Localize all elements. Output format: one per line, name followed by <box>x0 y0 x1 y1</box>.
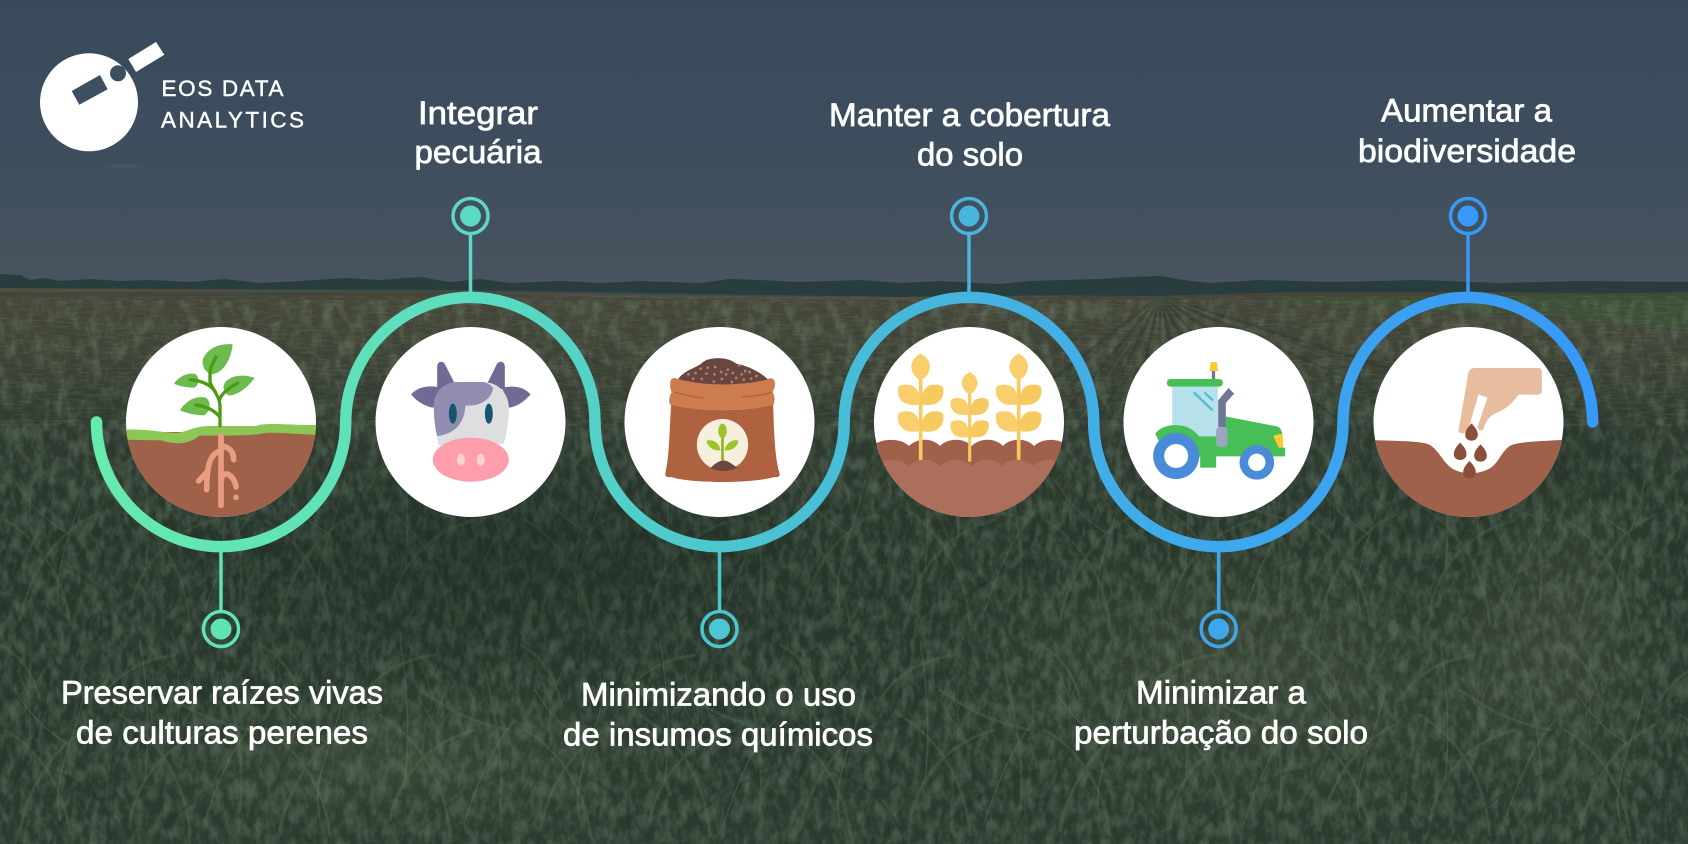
label: Minimizando o uso de insumos químicos <box>563 676 873 752</box>
label: Aumentar a biodiversidade: biodiversidade <box>1358 133 1576 169</box>
label: Aumentar a biodiversidade <box>1358 92 1576 169</box>
label: Manter a cobertura do solo <box>829 97 1110 172</box>
label: Manter a cobertura do solo: do solo <box>917 136 1023 172</box>
logo icon: satellite over globe <box>40 42 164 151</box>
label: Minimizar a perturbação do solo: Minimizar a <box>1136 674 1306 710</box>
label: Minimizando o uso de insumos químicos: de insumos químicos <box>563 716 873 752</box>
label: Integrar pecuária <box>414 95 542 170</box>
logo wordmark <box>161 76 304 132</box>
step 3 marker <box>702 552 737 646</box>
icon: green tractor <box>1123 327 1313 517</box>
logo: EOS Data Analytics <box>40 42 304 151</box>
label: Minimizar a perturbação do solo <box>1074 674 1368 750</box>
icon: wheat in soil <box>871 327 1069 524</box>
step 5 marker <box>1201 552 1236 646</box>
label: Preservar raízes vivas de culturas perenes: de culturas perenes <box>76 714 368 750</box>
icon: plant with roots <box>126 327 316 517</box>
label: Preservar raízes vivas de culturas perenes <box>61 674 383 750</box>
icon: cow head <box>375 327 565 517</box>
label: Aumentar a biodiversidade: Aumentar a <box>1381 92 1552 128</box>
label: Minimizando o uso de insumos químicos: Minimizando o uso <box>581 676 856 712</box>
logo wordmark: ANALYTICS <box>161 107 304 132</box>
step 6 marker <box>1450 198 1486 292</box>
icon: hand planting seeds <box>1370 327 1567 524</box>
label: Manter a cobertura do solo: Manter a cobertura <box>829 97 1110 133</box>
label: Preservar raízes vivas de culturas perenes: Preservar raízes vivas <box>61 674 383 710</box>
logo wordmark: EOS DATA <box>162 76 284 101</box>
winding gradient path <box>96 297 1593 547</box>
label: Minimizar a perturbação do solo: perturbação do solo <box>1074 714 1368 750</box>
label: Integrar pecuária: Integrar <box>418 95 538 131</box>
step 2 marker <box>453 198 488 292</box>
step 4 marker <box>952 198 986 292</box>
label: Integrar pecuária: pecuária <box>414 134 542 170</box>
step 1 marker <box>204 552 238 646</box>
icon: fertilizer sack <box>624 327 814 517</box>
